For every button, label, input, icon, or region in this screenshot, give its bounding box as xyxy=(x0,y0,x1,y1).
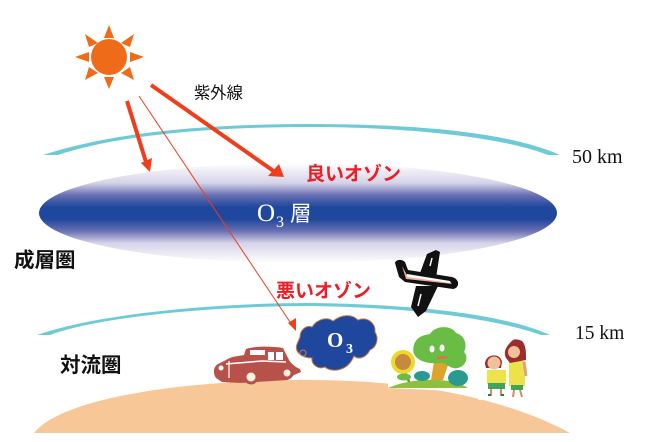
label: 50 km: 50 km xyxy=(572,146,623,168)
icon: car xyxy=(214,347,301,383)
icon: airplane xyxy=(395,250,458,317)
icon: crying child and mother xyxy=(485,339,526,397)
icon: sunflower xyxy=(391,350,415,384)
arrow: UV reaching stratosphere xyxy=(127,101,152,172)
icon: O3 smog cloud: O xyxy=(327,328,343,352)
icon: sun xyxy=(75,25,144,89)
label: 対流圏: 対流圏 xyxy=(60,354,122,377)
label: O3 層 xyxy=(257,200,312,231)
label: 15 km: 15 km xyxy=(575,323,624,344)
label: O3 層: 3 xyxy=(276,214,284,231)
ground xyxy=(34,380,570,433)
label: 良いオゾン: 良いオゾン xyxy=(306,163,401,185)
icon: O3 smog cloud xyxy=(296,316,377,370)
label: 成層圏: 成層圏 xyxy=(14,248,76,272)
label: 悪いオゾン: 悪いオゾン xyxy=(276,280,371,302)
white backing behind tree and people xyxy=(388,375,548,412)
15 km boundary arc xyxy=(37,303,550,335)
arrow: thin UV to bad ozone xyxy=(139,96,296,331)
ozone layer ellipse xyxy=(39,163,557,263)
icon: wilted tree xyxy=(388,327,468,388)
label: O3 層: O xyxy=(257,200,275,227)
50 km boundary arc xyxy=(43,124,560,155)
arrow: UV to good ozone xyxy=(151,85,284,177)
label: O3 層: 層 xyxy=(290,202,312,226)
icon: O3 smog cloud: 3 xyxy=(346,342,353,357)
label: 紫外線: 紫外線 xyxy=(194,84,243,102)
